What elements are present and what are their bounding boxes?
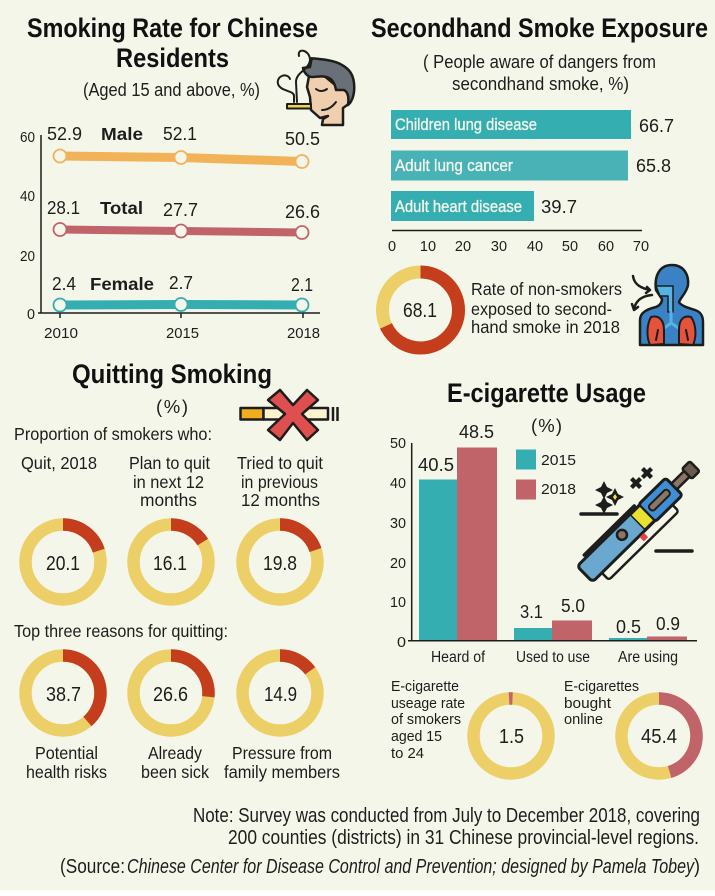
title: smoking rate <box>27 13 318 73</box>
bars: heard of <box>418 421 497 666</box>
bar chart axes: 30 <box>390 516 406 532</box>
series: male: 52.1 <box>163 123 197 144</box>
text: non-smokers exposed: exposed to second- <box>471 299 612 319</box>
subtitle: secondhand smoke: secondhand smoke, %) <box>452 73 629 94</box>
item: already been sick: been sick <box>141 762 209 782</box>
bars: used to use: Used to use <box>516 649 590 666</box>
item: plan to quit <box>129 453 210 600</box>
bar: adult lung cancer: 65.8 <box>636 155 671 176</box>
bar chart axes <box>390 436 697 651</box>
legend <box>516 450 576 500</box>
subtitle: e-cigarette usage: ( % ) <box>531 415 562 436</box>
donut: non-smokers exposed <box>382 272 458 348</box>
item: bought online <box>564 678 696 774</box>
icon: lungs <box>632 265 703 345</box>
text: non-smokers exposed <box>471 279 622 337</box>
series: female <box>52 272 313 312</box>
bars: heard of: 48.5 <box>459 421 494 442</box>
item: family pressure <box>224 656 340 782</box>
bar: adult heart disease: Adult heart disease <box>395 197 522 216</box>
item: usage among young smokers: 1.5 <box>499 726 524 748</box>
series: female: 2.7 <box>169 272 193 293</box>
chart axes <box>38 135 320 318</box>
panel: e-cigarette usage <box>390 378 709 775</box>
source: ) <box>694 856 700 878</box>
donut group: reasons <box>26 656 340 782</box>
series: total <box>47 197 320 239</box>
title: smoking rate: Smoking Rate for Chinese <box>27 13 318 43</box>
item: usage among young smokers: useage rate <box>391 695 465 712</box>
item: family pressure: Pressure from <box>232 743 332 763</box>
item: potential health risks: 38.7 <box>46 684 81 706</box>
item: usage among young smokers: aged 15 <box>391 728 442 745</box>
item: family pressure: family members <box>224 762 340 782</box>
panel: smoking rate <box>20 13 354 342</box>
item: already been sick: Already <box>148 743 202 763</box>
item: bought online: E-cigarettes <box>564 678 639 695</box>
panel: quitting smoking <box>14 359 340 782</box>
panel: secondhand smoke <box>371 13 708 348</box>
note <box>193 805 700 849</box>
bars: are using <box>609 613 687 666</box>
item: tried to quit: 12 months <box>241 490 320 510</box>
series: female: 2.1 <box>291 274 313 295</box>
bars: are using: 0.9 <box>656 613 680 634</box>
bar axis: 40 <box>527 239 543 255</box>
bar chart axes: 50 <box>390 436 406 452</box>
item: quit 2018 <box>21 453 100 600</box>
bar: children lung disease: 66.7 <box>639 115 674 136</box>
axis labels: 2015 <box>166 326 199 342</box>
bar chart axes: 0 <box>397 635 406 651</box>
series: male: 50.5 <box>285 128 320 149</box>
item: plan to quit: 16.1 <box>153 553 187 575</box>
title: e-cigarette usage: E-cigarette Usage <box>447 378 646 408</box>
bar: adult heart disease: 39.7 <box>541 196 577 217</box>
item: bought online: bought <box>564 695 612 712</box>
item: quit 2018: 20.1 <box>46 553 80 575</box>
bars: heard of: Heard of <box>431 649 486 666</box>
axis labels: 20 <box>20 249 35 265</box>
axis labels: 0 <box>27 307 35 323</box>
item: tried to quit: Tried to quit <box>237 453 323 473</box>
axis labels: 2018 <box>287 326 320 342</box>
bar chart axes: 10 <box>390 595 406 611</box>
series: male: 52.9 <box>47 123 82 144</box>
icon: no cigarette <box>240 390 338 440</box>
item: tried to quit: in previous <box>241 472 318 492</box>
bar chart axes: 40 <box>390 476 406 492</box>
bar axis: 0 <box>388 239 396 255</box>
bar chart: e-cigarette <box>390 421 697 666</box>
title: smoking rate: Residents <box>116 43 229 73</box>
icon: smoker <box>278 51 354 125</box>
bar axis: 10 <box>420 239 436 255</box>
item: family pressure: 14.9 <box>264 684 297 706</box>
bar chart axes: 20 <box>390 556 406 572</box>
donut group: proportion <box>21 453 323 600</box>
item: plan to quit: months <box>140 490 197 510</box>
item: already been sick: 26.6 <box>153 684 188 706</box>
item: plan to quit: Plan to quit <box>129 453 210 473</box>
subtitle: secondhand smoke <box>423 51 656 94</box>
item: bought online: online <box>564 711 603 728</box>
item: bought online: 45.4 <box>641 726 677 748</box>
bar axis: 30 <box>491 239 507 255</box>
bar axis: 70 <box>633 239 649 255</box>
series: total: 27.7 <box>163 199 198 220</box>
item: tried to quit: 19.8 <box>263 553 297 575</box>
legend: 2018 <box>541 482 576 498</box>
bar axis: 60 <box>598 239 614 255</box>
item: potential health risks: health risks <box>26 762 107 782</box>
item: usage among young smokers <box>391 678 550 775</box>
bars: used to use <box>514 595 592 666</box>
subtitle: smoking rate: (Aged 15 and above, %) <box>83 79 260 100</box>
bar: adult lung cancer: Adult lung cancer <box>395 156 513 175</box>
series: total: 26.6 <box>285 201 320 222</box>
text: non-smokers exposed: Rate of non-smokers <box>471 279 622 299</box>
donut: non-smokers exposed: 68.1 <box>403 300 437 322</box>
title: quitting smoking: Quitting Smoking <box>72 359 272 389</box>
item: already been sick <box>134 656 209 782</box>
bar chart: dangers <box>388 110 674 255</box>
axis labels: 2010 <box>44 326 78 342</box>
series: male <box>47 123 320 168</box>
bar axis <box>388 230 649 255</box>
bar: children lung disease <box>391 110 674 139</box>
legend: 2015 <box>541 453 576 469</box>
bars: are using: 0.5 <box>616 616 641 637</box>
axis labels: 40 <box>20 189 35 205</box>
item: potential health risks: Potential <box>35 743 98 763</box>
line chart: smoking rate <box>20 123 320 342</box>
series: male: Male <box>101 124 143 144</box>
series: total: Total <box>100 198 143 218</box>
bar axis: 20 <box>455 239 471 255</box>
bars: used to use: 3.1 <box>520 601 543 622</box>
text: proportion heading: Proportion of smokers who: <box>14 424 212 444</box>
bars: are using: Are using <box>618 649 678 666</box>
series: female: 2.4 <box>52 273 76 294</box>
subtitle: quitting smoking: ( % ) <box>156 396 188 417</box>
item: usage among young smokers: of smokers <box>391 711 461 728</box>
bar: children lung disease: Children lung disease <box>395 115 537 134</box>
subtitle: secondhand smoke: ( People aware of dangers from <box>423 51 656 72</box>
item: quit 2018: Quit, 2018 <box>21 453 97 473</box>
item: usage among young smokers: E-cigarette <box>391 678 459 695</box>
item: usage among young smokers: to 24 <box>391 745 424 762</box>
text: non-smokers exposed: hand smoke in 2018 <box>471 317 620 337</box>
bars: heard of: 40.5 <box>418 454 454 475</box>
item: potential health risks <box>26 656 107 782</box>
series: total: 28.1 <box>47 197 80 218</box>
bar axis: 50 <box>562 239 578 255</box>
icon: e-cigarette <box>575 456 709 589</box>
bar: adult heart disease <box>391 191 577 221</box>
bar: adult lung cancer <box>391 150 671 180</box>
axis labels <box>20 130 320 342</box>
item: plan to quit: in next 12 <box>133 472 204 492</box>
text: reasons heading: Top three reasons for quitting: <box>14 621 228 641</box>
source: (Source: <box>60 856 125 878</box>
item: tried to quit <box>237 453 323 600</box>
bars: used to use: 5.0 <box>561 595 585 616</box>
series: female: Female <box>90 274 154 294</box>
axis labels: 60 <box>20 130 35 146</box>
